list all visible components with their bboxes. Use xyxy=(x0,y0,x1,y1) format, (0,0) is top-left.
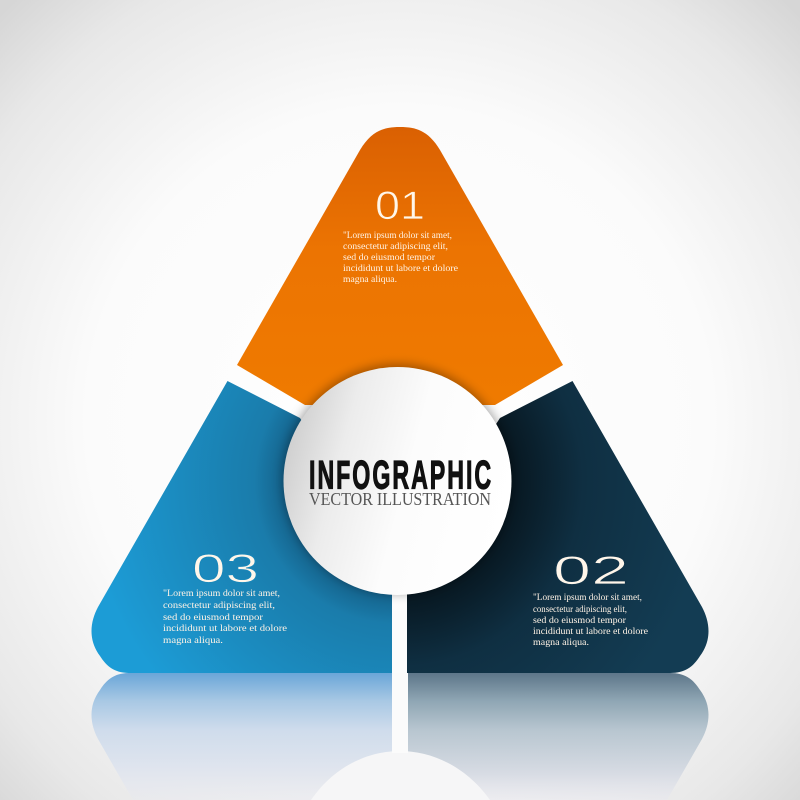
text block 02: magna aliqua. xyxy=(533,637,589,647)
panel: 03 blue segment xyxy=(92,381,392,673)
panel: 02 dark navy segment xyxy=(407,381,708,673)
text block 01: sed do eiusmod tempor xyxy=(343,252,435,262)
text block 01: incididunt ut labore et dolore xyxy=(343,263,458,273)
text block 03: incididunt ut labore et dolore xyxy=(163,623,287,633)
center circle shadow xyxy=(282,364,512,594)
number 02: 02 xyxy=(553,549,629,593)
text block 03: consectetur adipiscing elit, xyxy=(163,600,275,610)
text block 03 xyxy=(163,588,287,645)
panel: 01 orange segment xyxy=(237,127,563,405)
title: INFOGRAPHIC xyxy=(309,452,491,497)
floor reflection xyxy=(92,673,708,800)
text block 01: consectetur adipiscing elit, xyxy=(343,241,448,251)
text block 01: "Lorem ipsum dolor sit amet, xyxy=(343,230,452,240)
number 03: 03 xyxy=(192,547,259,591)
text block 01 xyxy=(343,230,458,284)
text block 03: sed do eiusmod tempor xyxy=(163,612,263,622)
text block 02: incididunt ut labore et dolore xyxy=(533,626,648,636)
text block 02: "Lorem ipsum dolor sit amet, xyxy=(533,592,642,602)
center circle xyxy=(284,367,512,595)
text block 02 xyxy=(533,592,648,647)
number 01: 01 xyxy=(375,184,425,228)
text block 03: "Lorem ipsum dolor sit amet, xyxy=(163,588,280,598)
text block 02: consectetur adipiscing elit, xyxy=(533,604,627,614)
text block 03: magna aliqua. xyxy=(163,635,223,645)
subtitle: VECTOR ILLUSTRATION xyxy=(309,489,491,509)
text block 01: magna aliqua. xyxy=(343,274,397,284)
text block 02: sed do eiusmod tempor xyxy=(533,615,626,625)
